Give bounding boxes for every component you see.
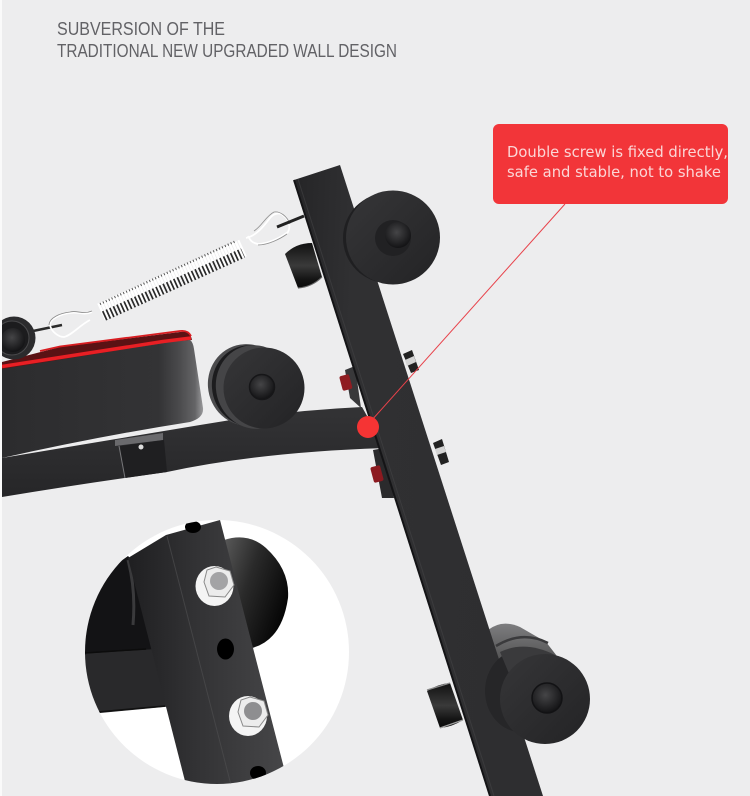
wheel ridges	[199, 335, 295, 435]
upper wheel	[343, 190, 440, 284]
lower wheel	[485, 647, 590, 744]
upper left bolt	[285, 243, 322, 288]
inset lower bolt	[229, 696, 268, 736]
red rear bolts	[339, 366, 394, 498]
spring and hooks	[33, 212, 304, 337]
inset horizontal bar	[85, 649, 166, 713]
seat top surface	[2, 332, 192, 370]
inset holes	[185, 521, 201, 533]
right rod	[277, 216, 304, 227]
callout	[493, 124, 728, 204]
callout: safe and stable, not to shake	[507, 163, 721, 181]
lower left bolt	[427, 683, 463, 728]
inset rear cylinder	[224, 537, 288, 648]
middle wheel	[199, 335, 304, 438]
right side nuts	[403, 350, 449, 465]
title	[57, 19, 397, 61]
title: TRADITIONAL NEW UPGRADED WALL DESIGN	[57, 41, 397, 61]
main upright post	[294, 165, 543, 796]
spring top coils	[100, 241, 236, 304]
title: SUBVERSION OF THE	[57, 19, 225, 39]
leader line	[371, 204, 565, 421]
callout: Double screw is fixed directly,	[507, 143, 728, 161]
left rod	[33, 325, 62, 331]
lower roller body	[488, 624, 560, 715]
seat pad	[2, 331, 203, 458]
inset left wheel	[85, 556, 152, 655]
inset upper bolt	[196, 566, 234, 606]
seat bracket	[115, 433, 167, 478]
red highlight	[2, 338, 191, 366]
left small wheel	[0, 310, 36, 366]
seat rim	[40, 331, 191, 351]
bench arm	[2, 407, 385, 497]
left hook	[50, 312, 92, 337]
spring white body	[101, 248, 243, 312]
seat body	[2, 340, 203, 458]
detail inset circle	[80, 520, 349, 790]
red marker dot	[357, 416, 379, 438]
inset post	[128, 520, 284, 790]
right hook	[246, 214, 289, 244]
wheel face	[224, 348, 304, 428]
spring dark coils	[104, 253, 243, 316]
